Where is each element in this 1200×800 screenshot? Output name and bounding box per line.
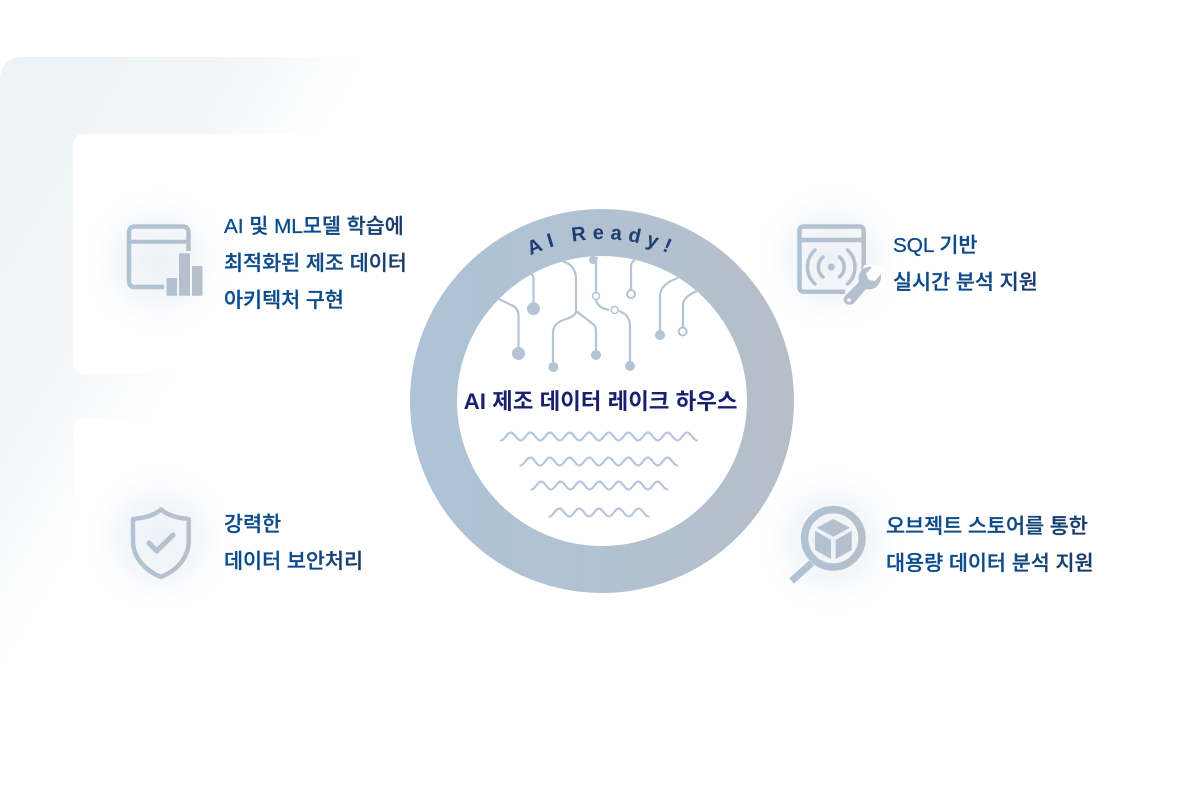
- wave lines: [501, 432, 697, 516]
- text: SQL description: 실시간 분석 지원: [893, 271, 1038, 294]
- text: object store description: 대용량 데이터 분석 지원: [886, 552, 1094, 575]
- text: object store description: [886, 515, 1094, 575]
- icon: magnifier with cube: [792, 510, 862, 581]
- icon: window with bar chart: [129, 226, 202, 296]
- feature: SQL real-time analysis: [752, 178, 1038, 338]
- text: security description: [224, 513, 363, 573]
- text: AI and ML description: 최적화된 제조 데이터: [224, 252, 407, 275]
- text: SQL description: [893, 234, 1038, 294]
- text: AI and ML description: [224, 215, 407, 312]
- text: AI and ML description: 아키텍처 구현: [224, 289, 344, 312]
- circuit lines: [499, 257, 697, 367]
- panel: upper left card: [73, 134, 1200, 374]
- text: security description: 강력한: [224, 513, 281, 536]
- feature: object store: [752, 460, 1094, 620]
- panel: lower left card: [73, 419, 1200, 800]
- feature: data security: [80, 458, 363, 618]
- center title: AI 제조 데이터 레이크 하우스: [464, 389, 737, 414]
- text: AI and ML description: AI 및 ML모델 학습에: [224, 215, 404, 238]
- text: object store description: 오브젝트 스토어를 통한: [886, 515, 1088, 538]
- icon: broadcast window with wrench: [800, 226, 884, 305]
- circuit nodes: [512, 256, 687, 372]
- central ring: [410, 209, 794, 593]
- ring label: AI Ready: AI Ready!: [530, 226, 672, 256]
- text: security description: 데이터 보안처리: [224, 550, 363, 573]
- icon: shield with check: [133, 510, 189, 577]
- text: SQL description: SQL 기반: [893, 234, 977, 257]
- feature: AI and ML architecture: [78, 182, 407, 342]
